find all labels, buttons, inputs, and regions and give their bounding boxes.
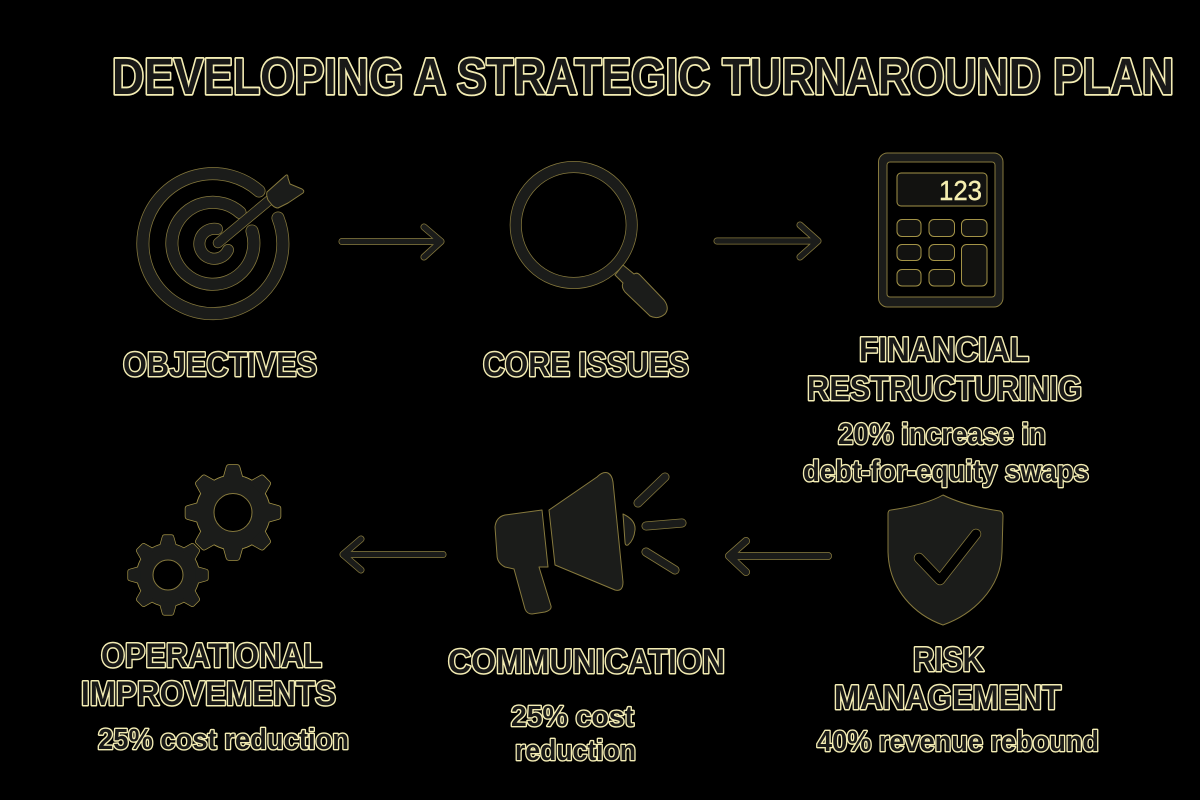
label: operational improvements: OPERATIONAL (101, 637, 322, 675)
stat: operational cost reduction: 25% cost reduction (98, 724, 349, 756)
arrow: risk management to communication (729, 541, 828, 572)
stat: communication cost reduction: 25% cost (511, 701, 634, 733)
arrow: objectives to core issues (342, 227, 441, 257)
icon: calculator (878, 153, 1003, 307)
label: financial restructuring: FINANCIAL (859, 331, 1029, 369)
stat: communication cost reduction (511, 701, 636, 767)
stat: debt-for-equity (803, 418, 1089, 488)
icon: gears (128, 465, 280, 615)
stat: debt-for-equity: debt-for-equity swaps (803, 455, 1089, 488)
icon: shield with check (888, 495, 1003, 625)
icon: magnifying glass (516, 167, 667, 318)
icon: target with dart (143, 174, 304, 314)
stat: communication cost reduction: reduction (515, 735, 636, 767)
arrow: core issues to financial restructuring (717, 225, 818, 257)
icon: megaphone (495, 472, 682, 614)
label: communication: COMMUNICATION (448, 643, 725, 681)
stat: debt-for-equity: 20% increase in (838, 418, 1046, 451)
calculator display: 123 (939, 175, 982, 206)
calculator display (897, 173, 987, 206)
label: operational improvements: IMPROVEMENTS (81, 675, 336, 713)
arrow: communication to operational improvements (343, 539, 443, 570)
label: risk management: MANAGEMENT (834, 679, 1061, 717)
label: risk management: RISK (913, 641, 984, 679)
label: core issues: CORE ISSUES (483, 346, 689, 384)
label: operational improvements (81, 637, 336, 713)
label: financial restructuring: RESTRUCTURINIG (807, 370, 1082, 408)
label: risk management (834, 641, 1061, 717)
label: financial restructuring (807, 331, 1082, 408)
label: objectives: OBJECTIVES (123, 346, 317, 384)
stat: revenue rebound: 40% revenue rebound (817, 726, 1099, 758)
